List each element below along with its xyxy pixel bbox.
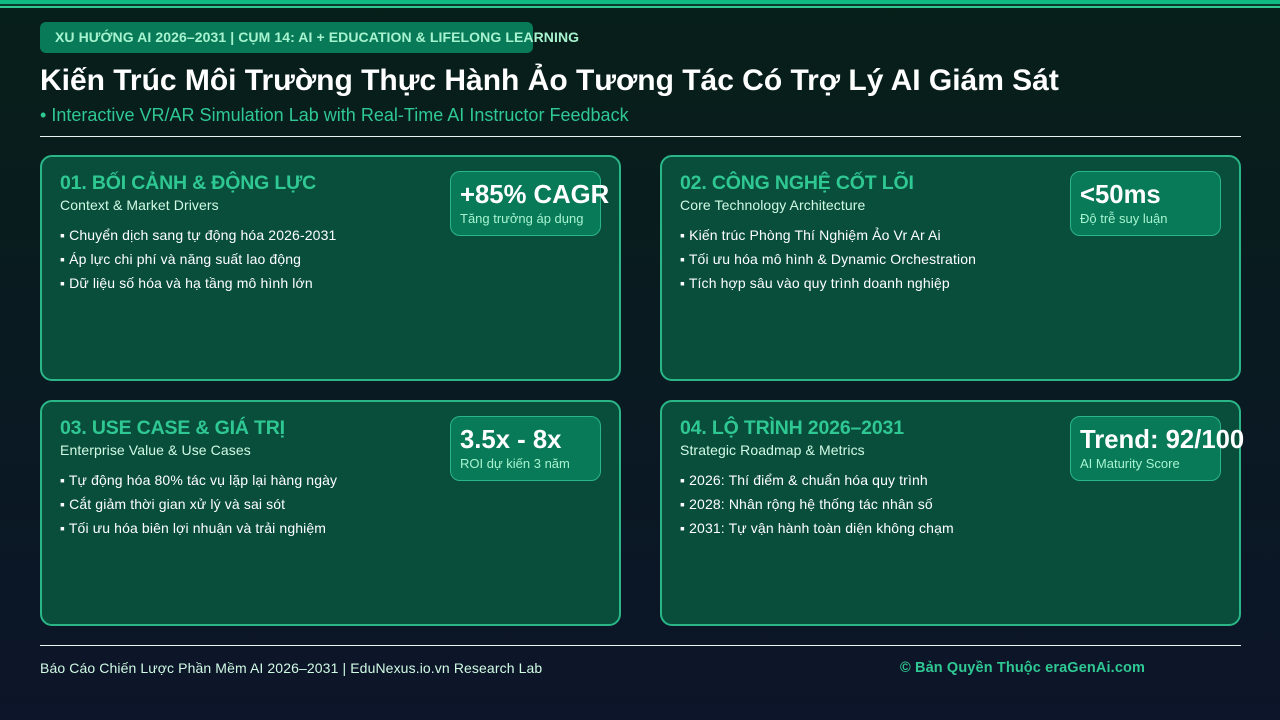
metric value: Trend: 92/100 bbox=[1080, 426, 1244, 454]
panel: core technology architecture bbox=[660, 155, 1241, 381]
footer source text: Báo Cáo Chiến Lược Phần Mềm AI 2026–2031 | EduNexus.io.vn Research Lab bbox=[40, 660, 542, 676]
panel 3 heading: 03. USE CASE & GIÁ TRỊ bbox=[60, 417, 285, 439]
panel 2 bullets: ▪ Tích hợp sâu vào quy trình doanh nghiệp bbox=[680, 275, 950, 291]
metric caption: Độ trễ suy luận bbox=[1080, 211, 1167, 226]
metric caption: AI Maturity Score bbox=[1080, 456, 1180, 471]
metric value: <50ms bbox=[1080, 181, 1161, 209]
panel 3 subheading: Enterprise Value & Use Cases bbox=[60, 442, 251, 458]
panel 3 bullets: ▪ Cắt giảm thời gian xử lý và sai sót bbox=[60, 496, 285, 512]
metric caption: Tăng trưởng áp dụng bbox=[460, 211, 583, 226]
panel 4 bullets bbox=[680, 472, 954, 536]
panel: enterprise value and use cases bbox=[40, 400, 621, 626]
panel 1 subheading: Context & Market Drivers bbox=[60, 197, 219, 213]
top accent bar bbox=[0, 0, 1280, 8]
metric value: +85% CAGR bbox=[460, 181, 609, 209]
metric value: 3.5x - 8x bbox=[460, 426, 561, 454]
panel 2 heading: 02. CÔNG NGHỆ CỐT LÕI bbox=[680, 172, 914, 194]
footer copyright: © Bản Quyền Thuộc eraGenAi.com bbox=[900, 660, 1145, 676]
panel 4 subheading: Strategic Roadmap & Metrics bbox=[680, 442, 865, 458]
panel 3 bullets: ▪ Tự động hóa 80% tác vụ lặp lại hàng ngày bbox=[60, 472, 337, 488]
category badge bbox=[40, 22, 533, 53]
panel 4 heading: 04. LỘ TRÌNH 2026–2031 bbox=[680, 417, 904, 439]
panel 2 metric badge bbox=[1070, 171, 1221, 236]
panel: strategic roadmap and metrics bbox=[660, 400, 1241, 626]
subtitle: • Interactive VR/AR Simulation Lab with Real-Time AI Instructor Feedback bbox=[40, 105, 629, 125]
panel 4 bullets: ▪ 2028: Nhân rộng hệ thống tác nhân số bbox=[680, 496, 933, 512]
panel 1 bullets: ▪ Dữ liệu số hóa và hạ tầng mô hình lớn bbox=[60, 275, 313, 291]
panel 1 bullets bbox=[60, 227, 336, 291]
panel 3 bullets bbox=[60, 472, 337, 536]
panel 1 bullets: ▪ Áp lực chi phí và năng suất lao động bbox=[60, 251, 301, 267]
panel 4 metric badge bbox=[1070, 416, 1221, 481]
badge text: XU HƯỚNG AI 2026–2031 | CỤM 14: AI + EDUCATION & LIFELONG LEARNING bbox=[55, 29, 579, 45]
panel 1 bullets: ▪ Chuyển dịch sang tự động hóa 2026-2031 bbox=[60, 227, 336, 243]
panel 1 metric badge bbox=[450, 171, 601, 236]
panel 4 bullets: ▪ 2031: Tự vận hành toàn diện không chạm bbox=[680, 520, 954, 536]
panel 3 bullets: ▪ Tối ưu hóa biên lợi nhuận và trải nghiệm bbox=[60, 520, 326, 536]
header divider bbox=[40, 136, 1241, 137]
panel 1 heading: 01. BỐI CẢNH & ĐỘNG LỰC bbox=[60, 172, 316, 194]
panel 3 metric badge bbox=[450, 416, 601, 481]
panel 2 bullets: ▪ Tối ưu hóa mô hình & Dynamic Orchestration bbox=[680, 251, 976, 267]
metric caption: ROI dự kiến 3 năm bbox=[460, 456, 570, 471]
footer divider bbox=[40, 645, 1241, 646]
panel 2 subheading: Core Technology Architecture bbox=[680, 197, 865, 213]
panel 2 bullets bbox=[680, 227, 976, 291]
panel 4 bullets: ▪ 2026: Thí điểm & chuẩn hóa quy trình bbox=[680, 472, 928, 488]
title: Kiến Trúc Môi Trường Thực Hành Ảo Tương Tác Có Trợ Lý AI Giám Sát bbox=[40, 64, 1059, 97]
panel: context and market drivers bbox=[40, 155, 621, 381]
panel 2 bullets: ▪ Kiến trúc Phòng Thí Nghiệm Ảo Vr Ar Ai bbox=[680, 227, 941, 243]
